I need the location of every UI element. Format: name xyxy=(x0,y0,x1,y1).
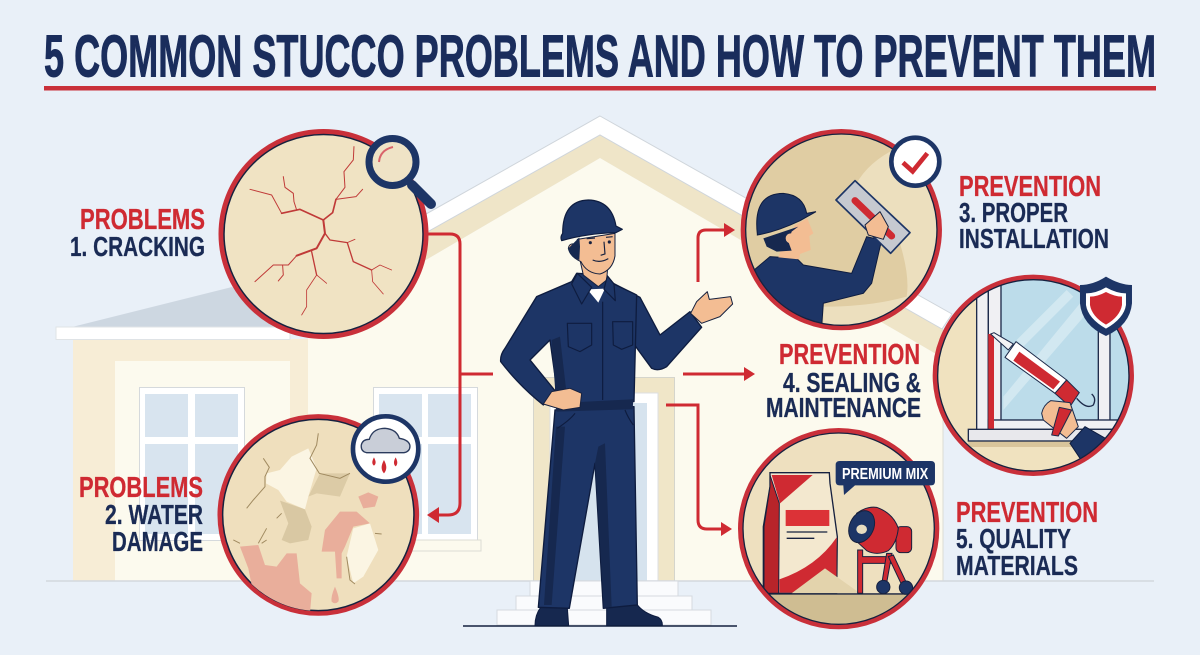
label: problem 2: PROBLEMS xyxy=(79,472,203,504)
sleeve xyxy=(1070,427,1108,460)
label: problem 2: DAMAGE xyxy=(112,526,203,557)
ground line xyxy=(46,580,1154,582)
callout: premium mix: PREMIUM MIX xyxy=(842,466,929,483)
label: prevention 5: 5. QUALITY xyxy=(956,523,1071,554)
circle: cracking xyxy=(221,132,426,336)
face xyxy=(568,233,615,274)
shoes xyxy=(535,604,662,626)
icon: check badge xyxy=(891,138,939,186)
icon: rain cloud xyxy=(353,416,418,482)
hard hat xyxy=(561,200,622,241)
label: problem 2 xyxy=(79,472,203,557)
label: problem 1: PROBLEMS xyxy=(80,204,205,236)
label: problem 2: 2. WATER xyxy=(105,499,203,530)
label: prevention 3: 3. PROPER xyxy=(959,197,1068,228)
crack lines xyxy=(250,147,392,315)
connector arrows: prevention xyxy=(666,223,755,536)
label: prevention 3: PREVENTION xyxy=(959,171,1101,203)
neck and shirt xyxy=(580,260,608,287)
left wing wall xyxy=(73,339,308,581)
door xyxy=(534,378,674,582)
worker hair xyxy=(763,227,798,252)
house illustration xyxy=(46,116,1154,626)
sand pile xyxy=(792,568,860,593)
title underline xyxy=(44,86,1156,90)
worker ear xyxy=(786,233,791,243)
ground xyxy=(770,594,907,624)
pavement line xyxy=(463,625,737,627)
circle: water damage xyxy=(220,417,417,613)
window frame xyxy=(976,286,1118,429)
label: prevention 3 xyxy=(959,171,1109,254)
collar xyxy=(572,273,615,304)
label: problem 1 xyxy=(70,204,205,262)
coverall details xyxy=(557,302,633,428)
sill and shadow xyxy=(968,442,1072,447)
trowel xyxy=(836,181,910,253)
circle: sealing and maintenance xyxy=(935,277,1134,474)
belt xyxy=(555,399,633,412)
torso and hip arm xyxy=(501,273,637,407)
trousers xyxy=(538,407,637,608)
cement bag xyxy=(763,473,837,593)
left wing eave xyxy=(56,327,290,340)
worker figure xyxy=(501,200,733,626)
wet stucco patch xyxy=(823,152,940,327)
facial features xyxy=(587,237,613,261)
steps xyxy=(497,581,711,625)
icon: shield xyxy=(1080,277,1132,336)
wall edge line xyxy=(942,330,944,581)
label: prevention 3: INSTALLATION xyxy=(959,223,1109,254)
worker hand xyxy=(865,212,888,239)
trouser shading xyxy=(544,427,612,608)
hand on hip xyxy=(543,388,582,410)
circle: proper installation xyxy=(743,131,940,328)
damage patches xyxy=(233,433,382,613)
label: prevention 4: PREVENTION xyxy=(779,339,920,371)
main wall xyxy=(308,158,943,581)
label: prevention 4: MAINTENANCE xyxy=(766,392,921,423)
circle: quality materials xyxy=(737,430,943,631)
red sealant bead xyxy=(988,334,994,429)
connector arrows: problems xyxy=(427,234,493,523)
right window xyxy=(371,388,481,551)
window glass xyxy=(1001,277,1134,420)
label: problem 1: 1. CRACKING xyxy=(70,231,205,262)
raised arm xyxy=(613,283,702,370)
worker arm and torso xyxy=(753,237,882,327)
label: prevention 4: 4. SEALING & xyxy=(783,367,921,398)
cement mixer xyxy=(844,506,913,594)
open hand xyxy=(691,292,733,323)
worker neck and face xyxy=(778,218,813,259)
label: prevention 5: MATERIALS xyxy=(956,550,1078,581)
worker hard hat xyxy=(757,193,816,235)
left window xyxy=(140,388,244,540)
label: prevention 5 xyxy=(956,497,1098,581)
gable trim xyxy=(308,135,943,358)
callout: premium mix xyxy=(836,461,935,495)
hair xyxy=(568,237,580,260)
caulk gun xyxy=(991,333,1095,438)
label: prevention 4 xyxy=(766,339,921,423)
left wing roof xyxy=(72,287,290,327)
icon: magnifying glass xyxy=(369,138,431,204)
gable fascia xyxy=(300,116,952,329)
label: prevention 5: PREVENTION xyxy=(956,497,1098,529)
